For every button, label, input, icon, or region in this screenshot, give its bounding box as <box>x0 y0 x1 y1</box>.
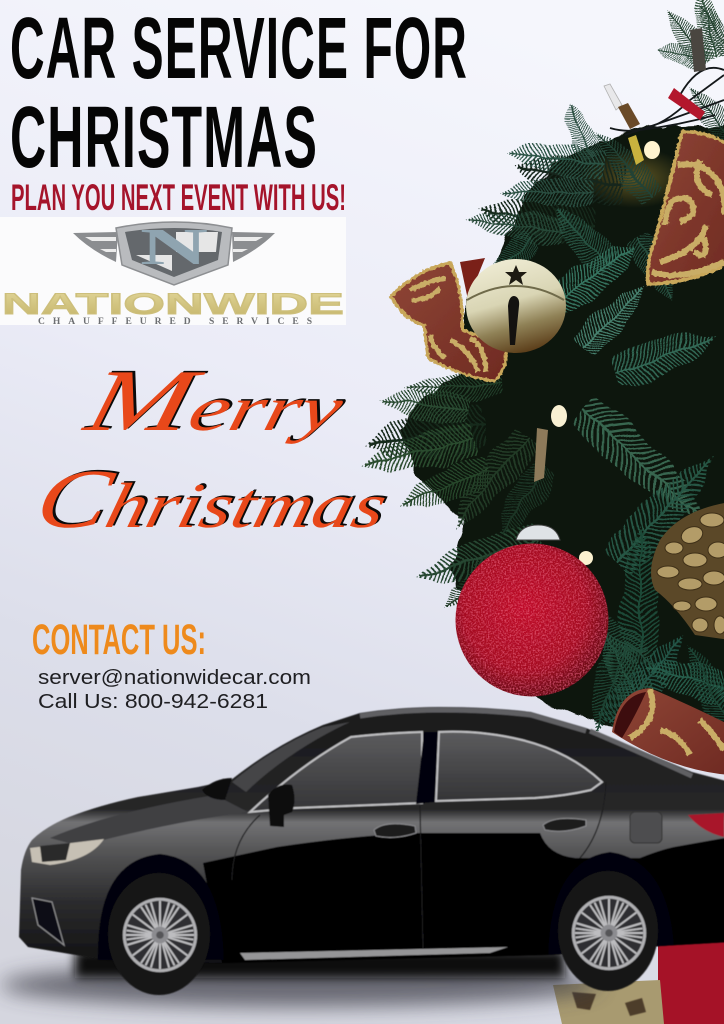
glowing lights <box>534 135 660 565</box>
front wheel <box>98 854 224 995</box>
headlight <box>30 839 104 865</box>
light string wires <box>610 68 724 135</box>
red carpet floor <box>658 940 724 1024</box>
subtitle: PLAN YOU NEXT EVENT WITH US! <box>11 177 346 218</box>
black sedan car <box>19 707 724 995</box>
tree dark mass <box>400 125 724 790</box>
side mirror <box>268 784 294 827</box>
logo shield <box>116 222 232 285</box>
pine cone <box>651 502 724 640</box>
bell slot <box>508 296 519 345</box>
logo: Nationwide Chauffeured Services <box>0 217 346 327</box>
gold bell at base <box>553 980 664 1024</box>
lower door black reflection <box>203 833 724 963</box>
logo wordmark: NATIONWIDE <box>2 288 344 321</box>
rear door handle <box>543 818 586 831</box>
Christmas: Christmas <box>27 453 398 546</box>
bell star <box>505 265 527 285</box>
windshield pillar <box>232 722 350 792</box>
B pillar <box>416 732 441 804</box>
roof highlight <box>360 710 692 776</box>
fuel door <box>630 812 662 843</box>
left ribbon bow <box>391 258 506 381</box>
title: CHRISTMAS <box>10 89 318 186</box>
warm glow around lights <box>580 148 690 208</box>
front window <box>250 732 422 812</box>
contact details: Call Us: 800-942-6281 <box>38 691 268 713</box>
jingle bell <box>466 259 566 353</box>
front door handle <box>374 824 416 837</box>
logo N monogram: N <box>140 219 208 276</box>
Merry: Merry <box>77 351 358 448</box>
christmas tree branches <box>340 0 724 790</box>
ground shadow <box>0 950 600 1007</box>
rear wheel <box>548 852 674 991</box>
Merry Christmas greeting <box>27 351 401 546</box>
tail light <box>688 813 724 837</box>
door lines <box>232 782 606 948</box>
ornament cap <box>516 525 560 540</box>
car body <box>19 707 724 963</box>
Merry: Merry <box>74 352 356 450</box>
red glitter ornament <box>456 525 608 696</box>
Christmas: Christmas <box>30 452 401 544</box>
front grille <box>32 898 64 945</box>
logo wings <box>73 232 275 262</box>
contact details: server@nationwidecar.com <box>38 667 311 689</box>
pine sprigs <box>340 0 724 754</box>
rear window <box>436 732 602 801</box>
bottom ribbon <box>612 688 724 775</box>
contact heading: CONTACT US: <box>32 616 206 664</box>
clear bulbs <box>604 28 706 129</box>
contact details <box>38 667 311 713</box>
title <box>10 0 468 186</box>
hood highlight <box>50 795 248 846</box>
wiper cowl <box>202 778 232 800</box>
logo tagline: CHAUFFEURED SERVICES <box>38 317 312 327</box>
top right ribbon bow <box>648 132 724 284</box>
side sill highlight <box>240 947 508 960</box>
